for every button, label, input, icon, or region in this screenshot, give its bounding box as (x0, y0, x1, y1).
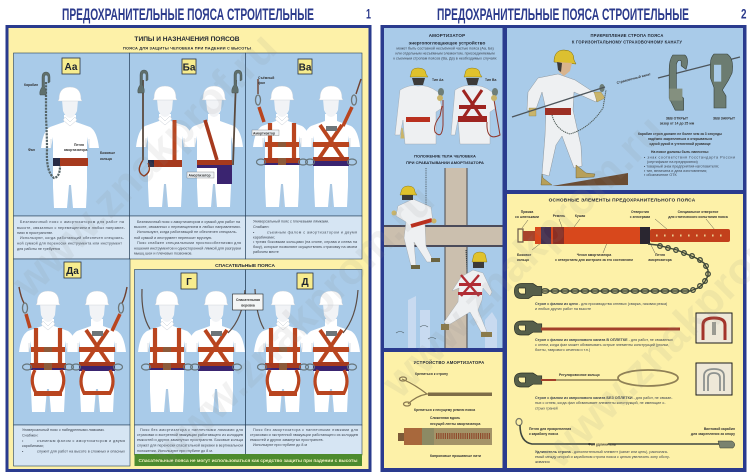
webbing diagram (400, 377, 492, 406)
figure Ba front (136, 70, 194, 207)
label Va (298, 59, 312, 74)
description Ba: Используют, когда работающий не обеспечен специаль- (137, 230, 238, 234)
extension strap (516, 418, 735, 448)
description D: емкостей и других замкнутых пространств. (250, 438, 324, 442)
text: braided sling: болты, таврового сечения и т.п.) (535, 348, 590, 352)
panel frame (7, 26, 370, 470)
labels cover (430, 416, 481, 458)
labels Aa: Фал (28, 148, 35, 152)
description G: Пояс без амортизатора с наплечными лямками для (140, 428, 243, 432)
callout: rescue rope: веревка (241, 304, 255, 308)
description G: служат для переноски спасательной веревки в вертикальном (137, 444, 243, 448)
description G: страховки и экстренной эвакуации работающего из колодцев (137, 433, 243, 437)
description Aa: высоте, связанных с перемещением в любых направле- (17, 226, 126, 230)
warning bar (134, 454, 362, 466)
rope label: Страховочный канат (616, 72, 651, 85)
heading: body position (406, 154, 484, 165)
labels Va (252, 76, 279, 136)
bottom callouts: кольцо (517, 258, 529, 262)
panel: belt elements (507, 194, 743, 468)
top callouts: Пряжка (521, 210, 533, 214)
heading: body position: ПОЛОЖЕНИЕ ТЕЛА ЧЕЛОВЕКА (414, 154, 476, 158)
description Va: съемным фалом с амортизатором и двумя (267, 230, 357, 234)
label G: Г (186, 277, 192, 288)
marking list: ▪ тип, величина и дата изготовления; (644, 169, 707, 173)
labels Aa (24, 83, 115, 161)
labels Aa: Карабин (24, 83, 38, 87)
panel: belt Ba (130, 53, 246, 259)
figure Ba back (185, 70, 243, 207)
label adjuster: Регулировочное кольцо (559, 373, 600, 377)
carabiner open (669, 55, 688, 110)
requirement text (638, 132, 722, 154)
requirement text: надёжно закрепляться и открываться (648, 137, 712, 141)
heading (572, 33, 682, 44)
carabiner captions: ЗЕВ ЗАКРЫТ (713, 116, 736, 120)
description Da: Универсальный пояс с набедренными лямками. (22, 428, 105, 432)
description D: Используют при глубине до 8 м (253, 443, 307, 447)
labels webbing: Крепиться к стропу (415, 372, 448, 376)
heading: body position: ПРИ СРАБАТЫВАНИИ АМОРТИЗАТОРА (406, 160, 484, 165)
right poster number: 2 (741, 6, 747, 22)
icon: unbraided detail (696, 363, 732, 395)
description G: емкостей и других замкнутых пространств. Боковые кольца (137, 438, 244, 442)
falling worker (392, 168, 440, 269)
heading: К ГОРИЗОНТАЛЬНОМУ СТРАХОВОЧНОМУ КАНАТУ (572, 40, 682, 44)
description Va: рабочем месте (253, 250, 279, 254)
belt illustration (518, 227, 730, 244)
suspended worker (441, 250, 492, 337)
top callouts: Кушак (575, 214, 585, 218)
roof beam (552, 173, 628, 186)
text: unbraided sling: ных с огнем, когда фал обхватывает элементы конструкций, не имеющие о- (535, 401, 666, 405)
description Va (253, 220, 358, 254)
intro text: может быть составной несъёмной частью пояса (Аа, Ба) (396, 46, 494, 50)
marking list: ▪ товарный знак предприятия-изготовителя; (644, 164, 719, 168)
description Da: съемным фалом с амортизатором и двумя (37, 439, 125, 443)
top callouts: со шпеньками (515, 215, 539, 219)
building structure (384, 168, 502, 348)
worker type Aa (395, 68, 444, 144)
labels Aa: Боковые (100, 151, 115, 155)
figure Va front (253, 79, 311, 207)
top callouts: Ремень (553, 214, 565, 218)
label Ba: Ба (183, 62, 196, 74)
description Da: служит для работ на высоте в сложных и опасных (37, 450, 125, 454)
label Da: Да (66, 266, 79, 277)
carabiner captions: зазор от 14 до 25 мм (660, 122, 695, 126)
subheading: энергопоглощающее устройство (409, 40, 485, 46)
figure G front (138, 289, 196, 412)
description Da: карабинами; (22, 444, 44, 448)
watermark: www.znakprom.ru (142, 176, 444, 476)
description D (250, 428, 358, 447)
label Aa: Аа (65, 62, 78, 73)
description Aa: Используют, когда работающий обеспечен специаль- (20, 236, 125, 240)
text: extension: Удлинитель стропа - дополнительный элемент (канат или цепь), располага- (535, 450, 669, 454)
requirement text: На поясе должны быть нанесены: (651, 150, 709, 154)
description G: положении. Используют при глубине до 8 м. (137, 449, 213, 453)
labels Aa: кольца (100, 157, 112, 161)
requirement text: Карабин строп должен не более чем за 3 секунды (638, 132, 722, 136)
description Va: карабинами; (253, 236, 275, 240)
text: extension: живания (535, 460, 550, 464)
labels cover: несущей ленты амортизатора (430, 422, 480, 426)
text: extension (535, 450, 671, 464)
worker (527, 50, 606, 185)
text: braided sling (535, 338, 673, 352)
bottom callouts: Чехол амортизатора (577, 253, 611, 257)
marking list: ▪ обозначение ОТК (644, 173, 677, 177)
panel: belt Da (14, 259, 130, 466)
top callouts: Специальное отверстие (678, 210, 718, 214)
heading: ОСНОВНЫЕ ЭЛЕМЕНТЫ ПРЕДОХРАНИТЕЛЬНОГО ПОЯСА (549, 198, 696, 204)
braided sling (514, 321, 680, 335)
figure D back (302, 290, 360, 412)
panel: belt Va (246, 53, 362, 259)
description Ba: высоте, связанных с перемещением в любых направлениях. (134, 225, 241, 229)
icon: braided detail (696, 313, 732, 343)
description G (137, 428, 244, 453)
label Aa (62, 58, 80, 74)
intro text: к съемным стропам поясов (Ва, Да) в необходимых случаях (393, 56, 497, 60)
panel frame (382, 26, 745, 470)
bottom callouts: Боковое (517, 253, 531, 257)
left poster number: 1 (366, 6, 371, 22)
text: braided sling: Строп с фалом из капронового каната В ОПЛЕТКЕ - для работ, не связанных (535, 338, 673, 342)
unbraided sling (514, 370, 678, 387)
top callouts: с зенкерами (630, 215, 650, 219)
panel: shock absorber (384, 28, 502, 348)
labels Va: Амортизатор (253, 131, 275, 135)
description Ba: ной сумкой и инструмент переносит вручную. (134, 236, 212, 240)
label Type Va: Тип Ва (485, 78, 496, 82)
description Va: Универсальный пояс с плечевыми лямками. (253, 220, 329, 224)
panel: shock absorber structure (384, 352, 502, 468)
labels webbing: Крепиться к несущему ремню пояса (414, 408, 475, 412)
section heading: types: ТИПЫ И НАЗНАЧЕНИЯ ПОЯСОВ (134, 36, 240, 43)
panel: belt Aa (14, 53, 130, 259)
bottom callouts: Петля (655, 253, 665, 257)
description Da: Снабжен: (22, 434, 38, 438)
labels Aa: Петля (74, 143, 84, 147)
labels extension: Фал удлинитель (588, 442, 616, 446)
panel: left poster (7, 26, 370, 470)
leader lines (522, 219, 715, 253)
text: unbraided sling: стрых граней (535, 406, 558, 410)
safety rope (512, 57, 740, 117)
description Ba: Пояс снабжен специальными приспособлениями для (137, 241, 241, 245)
requirement text: одной рукой в утепленной рукавице (649, 142, 711, 146)
description Aa: Безлямочный пояс с амортизатором для работ на (20, 220, 125, 224)
description Va: • (253, 230, 255, 234)
figure Va back (302, 79, 361, 207)
top callouts: Отверстия (631, 210, 649, 214)
labels cover: Капроновые прошивные нити (430, 454, 481, 458)
label D: Д (301, 277, 309, 288)
watermark: www.znakprom.ru (372, 106, 674, 408)
text: extension: емый между опорой и карабином стропа пояса с целью увеличить зону обслу- (535, 455, 671, 459)
bottom callouts: с отверстием для контроля за его состоянием (555, 258, 633, 262)
figure Da back (68, 287, 127, 412)
carabiner captions (660, 116, 736, 126)
intro text: или отдельным несъёмным элементом, присоединяемым (395, 52, 495, 56)
text: braided sling: с огнем, когда фал может обхватывать острые элементы конструкций (уголки, (535, 343, 669, 347)
label G (181, 273, 197, 289)
description Da: • (22, 439, 24, 443)
description Va: Снабжен: (253, 225, 269, 229)
left poster heading: ПРЕДОХРАНИТЕЛЬНЫЕ ПОЯСА СТРОИТЕЛЬНЫЕ (62, 5, 314, 24)
top callouts (515, 210, 728, 219)
description Ba: ношения инструментов и односторонней лямкой для разгрузки (134, 246, 241, 250)
text: chain sling (535, 302, 667, 311)
figure Aa (40, 72, 99, 208)
marking list: (сертификат на предприятии) (647, 160, 698, 164)
text: unbraided sling: Строп с фалом из капронового каната БЕЗ ОПЛЕТКИ - для работ, не связан- (535, 396, 673, 400)
heading: rescue belts: СПАСАТЕЛЬНЫЕ ПОЯСА (215, 263, 275, 269)
label D (297, 273, 313, 289)
description D: Пояс без амортизатора с наплечными лямками для (253, 428, 358, 432)
labels extension (529, 427, 735, 446)
description Va: боку), которые позволяют осуществлять страховку на своем (253, 245, 357, 249)
labels Va: фал (258, 81, 265, 85)
labels Aa: амортизатора (64, 148, 87, 152)
bottom callouts (517, 253, 672, 262)
figure Da front (19, 287, 77, 412)
panel: attachment to rope (507, 28, 743, 190)
warning bar: Спасательные пояса не могут использоваться как средство защиты при падении с высоты (138, 458, 358, 464)
description Ba (134, 220, 241, 256)
carabiner captions: ЗЕВ ОТКРЫТ (666, 116, 689, 120)
description Aa: ной сумкой для переноски инструмента или инструмент (17, 242, 122, 246)
worker type Va (451, 68, 500, 144)
description Aa: для работы не требуется (17, 247, 60, 251)
description Aa: ниях в пространстве. (17, 231, 53, 235)
description Da (22, 428, 125, 454)
bottom callouts: амортизатора (648, 258, 672, 262)
top callouts: для статического испытания пояса (668, 215, 728, 219)
description Ba: Безлямочный пояс с амортизатором и сумкой для работ на (137, 220, 241, 224)
text: unbraided sling (535, 396, 673, 410)
description Da: • (22, 450, 24, 454)
labels extension: к карабину пояса (529, 432, 558, 436)
stitched cover (398, 428, 492, 445)
labels extension: для закрепления за опору (691, 432, 735, 436)
section subheading: ПОЯСА ДЛЯ ЗАЩИТЫ ЧЕЛОВЕКА ПРИ ПАДЕНИИ С ВЫСОТЫ (123, 46, 251, 50)
intro text (393, 46, 497, 60)
panel: right poster (382, 26, 745, 470)
text: chain sling: Строп с фалом из цепи - для производства огневых (сварка, газовая резка) (535, 302, 667, 306)
labels extension: Петля для прикрепления (529, 427, 571, 431)
description D: страховки и экстренной эвакуации работающего из колодцев (250, 433, 358, 437)
callout: rescue rope (232, 294, 263, 310)
labels cover: Сложенная вдоль (430, 416, 460, 420)
watermark: www.znakprof.ru (2, 23, 287, 308)
description Ba: мышц шеи и плечевых позвонков. (134, 252, 192, 256)
carabiner closed (710, 54, 733, 108)
heading: АМОРТИЗАТОР (429, 33, 465, 38)
figure G back (187, 290, 245, 412)
text: chain sling: и любых других работ на высоте (535, 307, 591, 311)
marking list (644, 156, 735, 177)
labels Va: Съёмный (258, 76, 274, 80)
label Type Aa: Тип Аа (432, 78, 444, 82)
label Va: Ва (299, 62, 312, 74)
heading: УСТРОЙСТВО АМОРТИЗАТОРА (414, 360, 484, 365)
panel: rescue belts (134, 270, 362, 466)
label Da (64, 262, 81, 278)
label Ba (182, 59, 196, 74)
labels extension: Винтовой карабин (704, 427, 735, 431)
description Aa (17, 220, 126, 251)
heading: ПРИКРЕПЛЕНИЕ СТРОПА ПОЯСА (591, 33, 663, 38)
marking list: ▪ знак соответствия Госстандарта России (644, 156, 735, 160)
chain sling (514, 244, 710, 298)
figure D front (254, 289, 312, 412)
labels webbing (414, 372, 475, 412)
description Va: • тремя боковыми кольцами (на спине, справа и слева на (253, 240, 358, 244)
figure Ba back: Амортизатор (188, 174, 211, 178)
callout: rescue rope: Спасательная (236, 298, 260, 302)
